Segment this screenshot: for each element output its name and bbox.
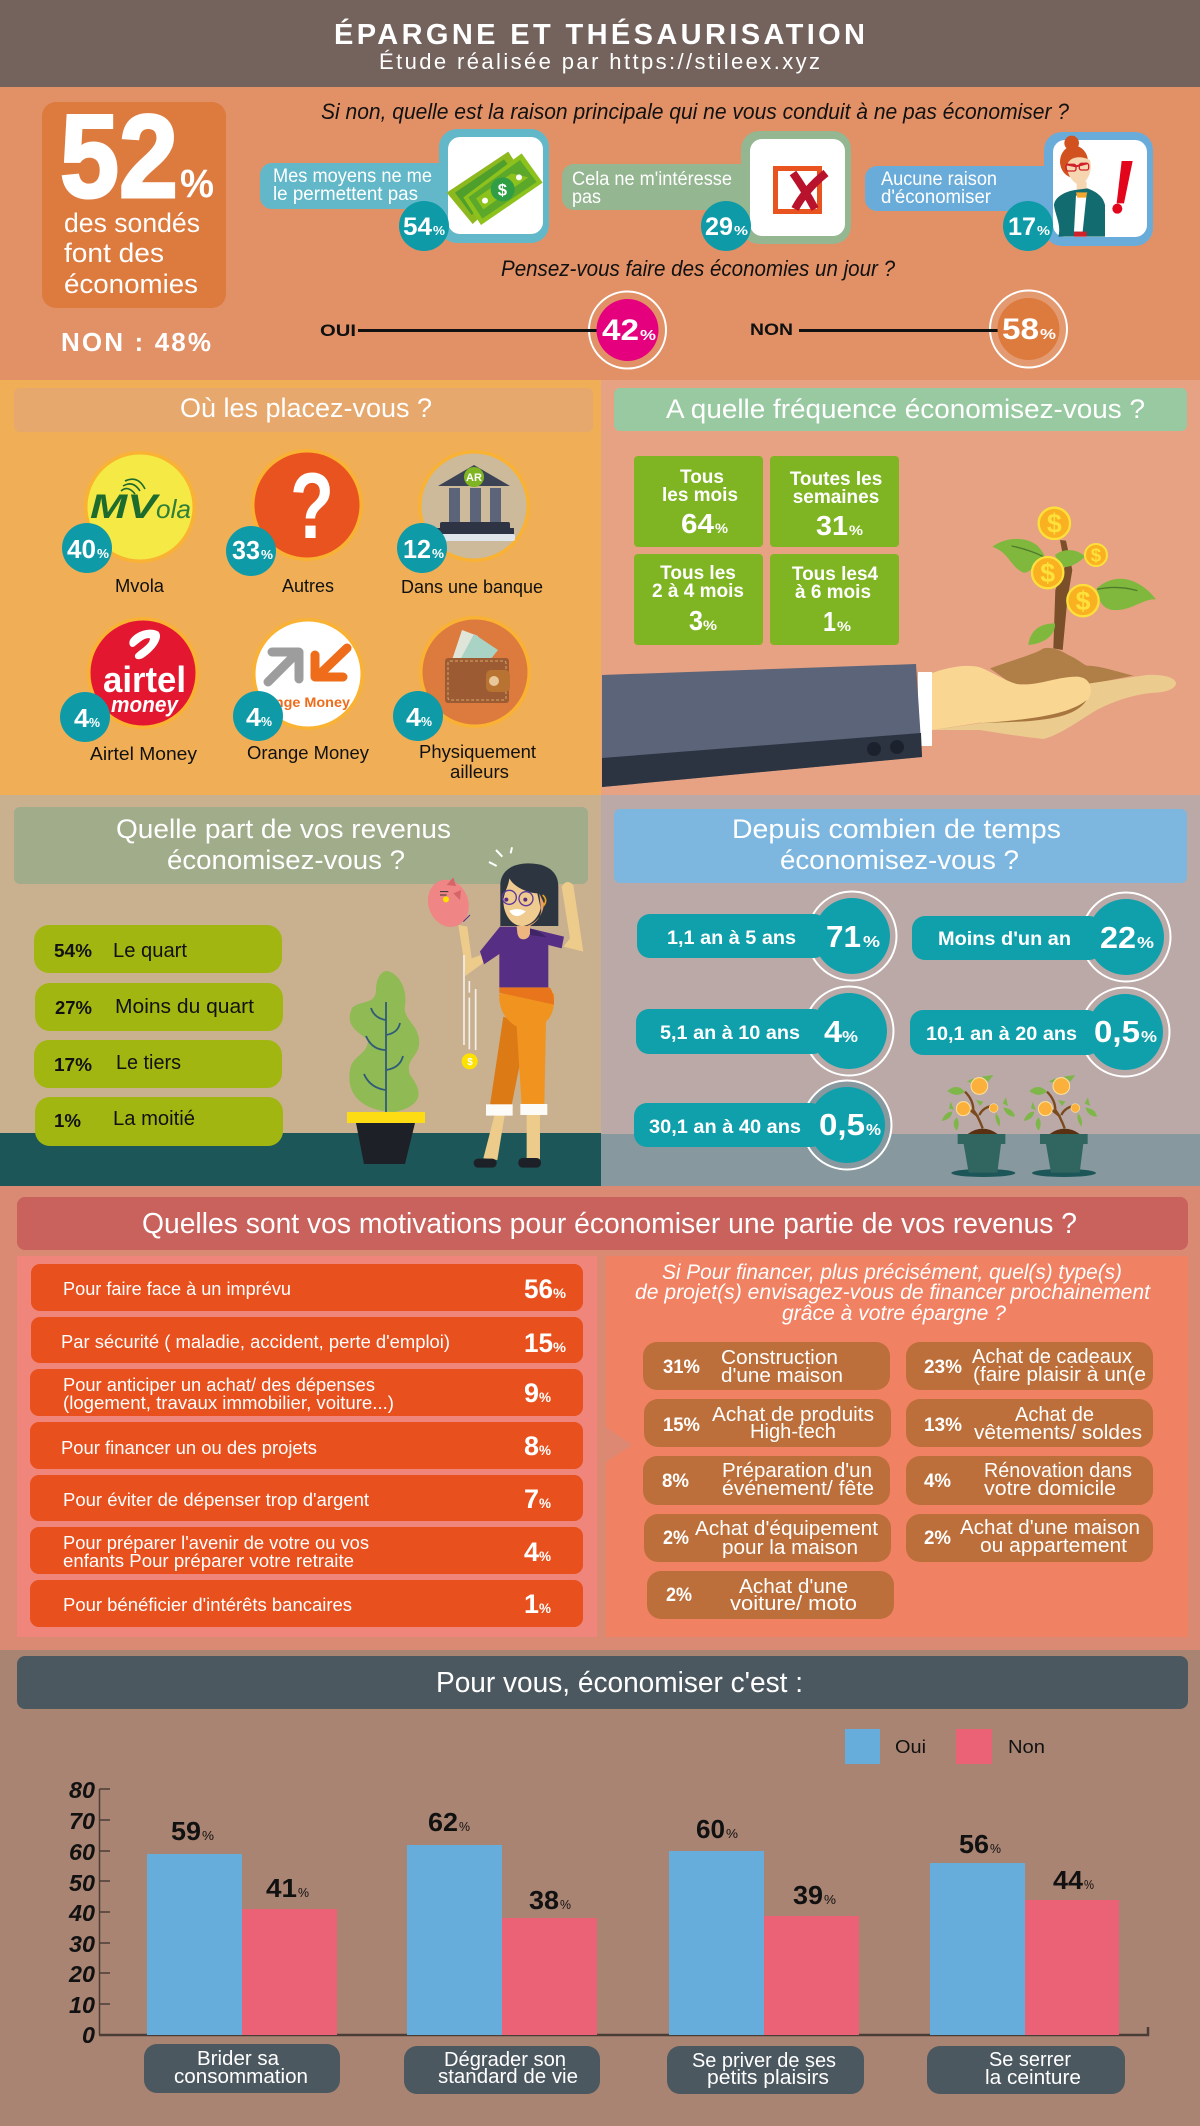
row: la moitié <box>35 1097 283 1146</box>
panel: 52 percent headline: % <box>180 162 214 206</box>
row: intérêts: % <box>539 1600 552 1616</box>
row: le tiers <box>34 1040 282 1088</box>
item: 5,1 an à 10 ans: 5,1 an à 10 ans <box>660 1023 800 1044</box>
pill: high-tech: High-tech <box>750 1421 836 1443</box>
item: Orange Money: Orange Money <box>250 694 350 710</box>
item: 10,1 an à 20 ans: % <box>1141 1029 1157 1046</box>
panel: économiser c'est <box>17 1656 1188 2094</box>
row: anticiper: 9 <box>524 1378 539 1408</box>
y axis: 0 <box>82 2022 95 2048</box>
row: anticiper: Pour anticiper un achat/ des dépenses <box>63 1375 375 1395</box>
panel: 52 percent headline: des sondés <box>64 208 200 238</box>
y axis: 40 <box>68 1900 95 1926</box>
card: aucune raison 17 percent: d'économiser <box>881 187 992 208</box>
row: projets: Pour financer un ou des projets <box>61 1438 317 1458</box>
item: 1,1 an à 5 ans: % <box>863 934 880 951</box>
y axis: 20 <box>68 1961 95 1987</box>
pill: équipement <box>644 1514 891 1562</box>
bars: se serrer la ceinture: Se serrer <box>989 2049 1071 2071</box>
non 58 percent: 58 <box>1002 313 1039 346</box>
oui 42 percent: % <box>640 327 656 344</box>
item: Mvola <box>62 451 196 596</box>
pill: construction: d'une maison <box>721 1365 843 1387</box>
header banner <box>0 0 1200 87</box>
tile: tous les mois <box>634 456 763 547</box>
oui 42 percent <box>320 292 666 368</box>
illustration: hand with money plant: $ <box>1040 558 1055 588</box>
y axis: 80 <box>69 1777 95 1803</box>
item: Dans une banque: % <box>432 546 444 561</box>
row: sécurité <box>31 1317 583 1363</box>
pill: construction <box>643 1342 890 1390</box>
row: avenir: Pour préparer l'avenir de votre ou vos <box>63 1533 369 1553</box>
panel: motivations <box>17 1197 1188 1637</box>
pill: cadeaux: (faire plaisir à un(e <box>973 1364 1146 1386</box>
item: Airtel Money <box>60 617 199 764</box>
item: 1,1 an à 5 ans: 1,1 an à 5 ans <box>667 928 796 949</box>
pill: voiture: voiture/ moto <box>730 1593 857 1615</box>
bars: dégrader son standard de vie: Dégrader son <box>444 2049 566 2071</box>
item: Physiquement ailleurs: % <box>421 714 432 729</box>
item: 30,1 an à 40 ans: % <box>866 1122 881 1139</box>
pill: vêtements: Achat de <box>1015 1404 1094 1426</box>
bars: se serrer la ceinture: % <box>1084 1877 1094 1892</box>
illustration: woman with piggy bank: $ <box>467 1057 473 1068</box>
item: Orange Money: % <box>261 714 272 729</box>
icon: banknotes: $ <box>498 180 508 199</box>
row: intérêts <box>30 1580 583 1627</box>
tile: toutes les semaines <box>770 456 899 547</box>
row: éviter de dépenser: 7 <box>524 1484 539 1514</box>
card: pas intéressé 29 percent: pas <box>572 187 601 208</box>
item: Airtel Money: % <box>89 715 100 730</box>
row: intérêts: Pour bénéficier d'intérêts bancaires <box>63 1595 352 1615</box>
panel: depuis combien de temps <box>601 809 1200 1186</box>
item: 30,1 an à 40 ans: 0,5 <box>819 1107 865 1142</box>
row: sécurité: % <box>553 1339 567 1355</box>
heading: Quelle part de vos revenus <box>116 814 451 844</box>
pill: voiture <box>647 1571 894 1619</box>
item: 5,1 an à 10 ans: % <box>842 1029 858 1046</box>
tile: toutes les semaines: 31 <box>816 510 848 541</box>
item: 5,1 an à 10 ans: 4 <box>824 1014 843 1049</box>
item: Physiquement ailleurs: Physiquement <box>419 742 536 762</box>
row: avenir: 4 <box>524 1537 539 1567</box>
item: Autres: Autres <box>282 576 334 596</box>
panel: fréquence <box>602 388 1187 787</box>
tile: 2 à 4 mois: 2 à 4 mois <box>652 581 744 602</box>
bars: se serrer la ceinture: 56 <box>959 1829 989 1859</box>
pill: construction: 31% <box>663 1357 700 1378</box>
row: moins du quart <box>35 983 283 1031</box>
pill: événement: événement/ fête <box>722 1478 874 1500</box>
tile: 2 à 4 mois <box>634 554 763 645</box>
item: moins d'un an <box>912 892 1170 982</box>
non 58 percent: NON <box>750 320 793 339</box>
non 58 percent: % <box>1040 326 1056 343</box>
illustration: hand with money plant: $ <box>1076 586 1091 616</box>
card: pas intéressé 29 percent: 29 <box>705 213 733 241</box>
title: ÉPARGNE ET THÉSAURISATION <box>334 17 865 51</box>
pill: rénovation <box>906 1456 1153 1505</box>
question: types de projets: Si Pour financer, plus précisément, quel(s) type(s) <box>662 1261 1122 1284</box>
heading: Pour vous, économiser c'est : <box>436 1667 803 1699</box>
item: 1,1 an à 5 ans: 71 <box>826 919 861 954</box>
item: Mvola: MV <box>90 488 161 526</box>
item: Physiquement ailleurs <box>393 616 536 782</box>
question: types de projets: de projet(s) envisagez-vous de financer prochainement <box>635 1281 1151 1304</box>
row: éviter de dépenser: % <box>539 1495 552 1511</box>
y axis: 50 <box>69 1870 95 1896</box>
item: 1,1 an à 5 ans <box>637 892 896 980</box>
bars: se priver de ses petits plaisirs: % <box>824 1892 836 1907</box>
row: moins du quart: 27% <box>55 998 92 1018</box>
non 48 percent: NON : 48% <box>61 327 211 357</box>
y axis <box>68 1777 1148 2048</box>
row: le quart <box>34 925 282 973</box>
tile: 2 à 4 mois: % <box>703 617 718 633</box>
illustration: hand with money plant <box>602 508 1176 787</box>
row: le quart: 54% <box>54 941 92 961</box>
pill: voiture: 2% <box>666 1585 692 1606</box>
card: aucune raison 17 percent: % <box>1037 223 1050 238</box>
row: avenir <box>30 1527 583 1574</box>
pill: high-tech: Achat de produits <box>712 1404 874 1426</box>
row: projets: % <box>539 1442 552 1458</box>
row: projets: 8 <box>524 1431 539 1461</box>
y axis: 10 <box>69 1992 95 2018</box>
item: moins d'un an: Moins d'un an <box>938 929 1071 950</box>
row: le tiers: Le tiers <box>116 1052 181 1074</box>
pill: vêtements: 13% <box>924 1415 962 1436</box>
illustration: potted plant <box>347 971 425 1164</box>
row: sécurité: Par sécurité ( maladie, accident, perte d'emploi) <box>61 1332 450 1352</box>
heading <box>17 1197 1188 1250</box>
row: avenir: enfants Pour préparer votre retraite <box>63 1551 354 1571</box>
tile: tous les mois: 64 <box>681 508 714 539</box>
pill: équipement: pour la maison <box>722 1537 858 1559</box>
pill: maison appartement: ou appartement <box>980 1535 1127 1557</box>
card: moyens 54 percent <box>260 129 549 251</box>
card: aucune raison 17 percent: Aucune raison <box>881 169 997 190</box>
bars: se serrer la ceinture: la ceinture <box>985 2067 1081 2089</box>
bars: se serrer la ceinture <box>927 1829 1125 2094</box>
row: anticiper <box>30 1369 583 1416</box>
item: Mvola: Mvola <box>115 576 165 596</box>
item: Autres: 33 <box>232 535 260 565</box>
tile: toutes les semaines: semaines <box>793 487 879 508</box>
heading <box>14 807 588 884</box>
panel: part de revenus <box>0 807 601 1186</box>
pill: cadeaux: 23% <box>924 1357 962 1378</box>
item: Dans une banque: 12 <box>403 534 431 564</box>
bars: dégrader son standard de vie: % <box>459 1819 470 1834</box>
heading: économisez-vous ? <box>167 845 405 875</box>
card: pas intéressé 29 percent <box>562 131 851 251</box>
row: éviter de dépenser: Pour éviter de dépenser trop d'argent <box>63 1490 369 1510</box>
tile: tous les mois: % <box>715 520 729 536</box>
item: Autres: % <box>261 547 273 562</box>
tile: toutes les semaines: Toutes les <box>790 469 882 490</box>
card: aucune raison 17 percent <box>865 132 1153 251</box>
card: moyens 54 percent: % <box>433 223 445 238</box>
bars: brider sa consommation: consommation <box>174 2066 308 2088</box>
tile: 4 à 6 mois <box>770 554 899 645</box>
item: moins d'un an: 22 <box>1100 920 1136 955</box>
pill: vêtements: vêtements/ soldes <box>974 1422 1142 1444</box>
legend: Oui <box>895 1737 926 1757</box>
row: intérêts: 1 <box>524 1589 539 1619</box>
bars: brider sa consommation: % <box>202 1828 214 1843</box>
heading: Où les placez-vous ? <box>180 393 432 423</box>
bars: brider sa consommation: 59 <box>171 1816 201 1846</box>
bars: dégrader son standard de vie: % <box>560 1897 571 1912</box>
row: moins du quart: Moins du quart <box>115 996 254 1018</box>
pill: maison appartement: 2% <box>924 1528 951 1549</box>
row: projets <box>30 1422 583 1469</box>
item: 10,1 an à 20 ans: 0,5 <box>1094 1014 1140 1049</box>
legend <box>845 1729 1045 1764</box>
heading <box>14 388 593 432</box>
item: Autres: ? <box>290 453 334 558</box>
row: avenir: % <box>539 1548 552 1564</box>
heading <box>17 1656 1188 1709</box>
heading: économisez-vous ? <box>780 845 1019 875</box>
row: imprévu: Pour faire face à un imprévu <box>63 1279 291 1299</box>
pill: high-tech <box>644 1399 891 1447</box>
pill: rénovation: votre domicile <box>984 1478 1116 1500</box>
bars: dégrader son standard de vie: standard de vie <box>438 2066 578 2088</box>
illustration: money trees in pots <box>942 1075 1097 1177</box>
item: Dans une banque: Dans une banque <box>401 577 543 597</box>
card: pas intéressé 29 percent: % <box>734 223 749 238</box>
item: Airtel Money: airtel <box>103 659 186 700</box>
item: 5,1 an à 10 ans <box>636 986 894 1076</box>
tile: 4 à 6 mois: Tous les4 <box>792 564 879 585</box>
tile: tous les mois: les mois <box>662 485 738 506</box>
card: moyens 54 percent: Mes moyens ne me <box>273 166 432 187</box>
icon: crossed box <box>776 168 826 212</box>
row: anticiper: (logement, travaux immobilier, voiture...) <box>63 1393 394 1413</box>
pill: voiture: Achat d'une <box>739 1576 848 1598</box>
illustration: woman with piggy bank <box>421 847 583 1168</box>
bars: se priver de ses petits plaisirs: petits plaisirs <box>707 2067 829 2089</box>
bars: brider sa consommation <box>144 1816 340 2093</box>
card: moyens 54 percent: le permettent pas <box>273 184 418 205</box>
item: Mvola: 40 <box>67 534 96 564</box>
row: imprévu: % <box>553 1285 567 1301</box>
item: Airtel Money: 4 <box>74 703 90 733</box>
row: éviter de dépenser <box>30 1475 583 1521</box>
pill: cadeaux: Achat de cadeaux <box>972 1346 1132 1368</box>
legend: Non <box>1008 1737 1045 1757</box>
heading <box>614 809 1187 883</box>
pill: vêtements <box>906 1399 1153 1447</box>
bars: dégrader son standard de vie: 38 <box>529 1885 559 1915</box>
item: Orange Money: 4 <box>246 702 262 732</box>
bars: brider sa consommation: % <box>298 1885 309 1900</box>
tile: 4 à 6 mois: à 6 mois <box>795 582 871 603</box>
bars: se priver de ses petits plaisirs <box>667 1814 864 2094</box>
row: imprévu: 56 <box>524 1274 553 1304</box>
heading <box>614 388 1187 431</box>
pill: rénovation: Rénovation dans <box>984 1460 1132 1482</box>
tile: tous les mois: Tous <box>680 467 724 488</box>
item: 30,1 an à 40 ans <box>634 1080 892 1170</box>
row: la moitié: La moitié <box>113 1108 195 1130</box>
item: Orange Money: Orange Money <box>247 743 369 763</box>
question: raison principale: Si non, quelle est la raison principale qui ne vous conduit à ne pas économiser ? <box>321 99 1070 124</box>
item: Orange Money <box>233 618 369 763</box>
icon: woman with exclamation mark <box>1054 136 1133 237</box>
illustration: hand with money plant: $ <box>1047 509 1062 539</box>
pill: high-tech: 15% <box>663 1415 700 1436</box>
pill: construction: Construction <box>721 1347 838 1369</box>
oui 42 percent: OUI <box>320 321 356 340</box>
bars: se serrer la ceinture: 44 <box>1053 1865 1084 1895</box>
bars: se serrer la ceinture: % <box>990 1841 1001 1856</box>
arrow <box>606 1427 632 1462</box>
bars: se priver de ses petits plaisirs: % <box>726 1826 738 1841</box>
heading: Quelles sont vos motivations pour économiser une partie de vos revenus ? <box>142 1208 1077 1240</box>
panel: 52 percent headline: font des <box>64 238 164 268</box>
item: Mvola: ola <box>156 494 191 524</box>
panel: où les placez-vous <box>14 388 593 782</box>
y axis: 30 <box>69 1931 95 1957</box>
tile: 4 à 6 mois: % <box>837 618 852 634</box>
bars: dégrader son standard de vie <box>404 1807 600 2094</box>
pill: événement: 8% <box>662 1471 689 1492</box>
row: imprévu <box>31 1264 583 1311</box>
pill: événement <box>643 1456 890 1505</box>
subtitle: Étude réalisée par https://stileex.xyz <box>379 49 820 74</box>
item: moins d'un an: % <box>1137 935 1154 952</box>
pill: cadeaux <box>906 1342 1153 1390</box>
pill: rénovation: 4% <box>924 1471 951 1492</box>
item: Physiquement ailleurs: 4 <box>406 702 422 732</box>
item: Dans une banque <box>397 450 543 597</box>
y axis: 60 <box>69 1839 95 1865</box>
row: le quart: Le quart <box>113 940 187 962</box>
pill: équipement: Achat d'équipement <box>695 1518 878 1540</box>
bars: brider sa consommation: 41 <box>266 1873 297 1903</box>
illustration: hand with money plant: $ <box>1091 545 1102 566</box>
y axis: 70 <box>69 1808 95 1834</box>
panel: 52 percent headline: économies <box>64 269 198 299</box>
tile: toutes les semaines: % <box>849 522 864 538</box>
question: économies un jour: Pensez-vous faire des économies un jour ? <box>501 256 896 281</box>
tile: 2 à 4 mois: Tous les <box>660 563 736 584</box>
item: Airtel Money: money <box>111 692 180 717</box>
item: Airtel Money: Airtel Money <box>90 744 197 764</box>
row: le tiers: 17% <box>54 1055 92 1075</box>
tile: 4 à 6 mois: 1 <box>823 606 836 637</box>
item: Dans une banque: AR <box>466 472 482 484</box>
pill: équipement: 2% <box>663 1528 689 1549</box>
item: Physiquement ailleurs: ailleurs <box>450 762 509 782</box>
question: types de projets: grâce à votre épargne ? <box>782 1302 1006 1325</box>
bars: dégrader son standard de vie: 62 <box>428 1807 458 1837</box>
row: la moitié: 1% <box>54 1111 81 1131</box>
non 58 percent <box>750 290 1067 368</box>
oui 42 percent: 42 <box>602 314 639 347</box>
panel: 52 percent headline <box>42 91 226 308</box>
heading: A quelle fréquence économisez-vous ? <box>666 394 1145 424</box>
item: 10,1 an à 20 ans <box>910 988 1170 1076</box>
tile: 2 à 4 mois: 3 <box>689 605 703 636</box>
bars: se priver de ses petits plaisirs: 60 <box>696 1814 725 1844</box>
row: sécurité: 15 <box>524 1328 553 1358</box>
icon: banknotes <box>447 152 543 225</box>
bars: brider sa consommation: Brider sa <box>197 2048 280 2070</box>
item: Mvola: % <box>97 546 109 561</box>
card: pas intéressé 29 percent: Cela ne m'intéresse <box>572 169 732 190</box>
heading: Depuis combien de temps <box>732 814 1061 844</box>
card: aucune raison 17 percent: 17 <box>1008 213 1036 241</box>
pill: maison appartement: Achat d'une maison <box>960 1517 1140 1539</box>
item: 10,1 an à 20 ans: 10,1 an à 20 ans <box>926 1024 1077 1045</box>
item: 30,1 an à 40 ans: 30,1 an à 40 ans <box>649 1117 801 1138</box>
bars: se priver de ses petits plaisirs: Se priver de ses <box>692 2050 836 2072</box>
panel: 52 percent headline: 52 <box>60 91 178 223</box>
bars: se priver de ses petits plaisirs: 39 <box>793 1880 823 1910</box>
row: anticiper: % <box>539 1389 552 1405</box>
question: types de projets <box>635 1261 1151 1325</box>
item: Autres <box>226 449 363 596</box>
pill: maison appartement <box>906 1514 1153 1562</box>
pill: événement: Préparation d'un <box>722 1460 872 1482</box>
card: moyens 54 percent: 54 <box>403 213 432 241</box>
